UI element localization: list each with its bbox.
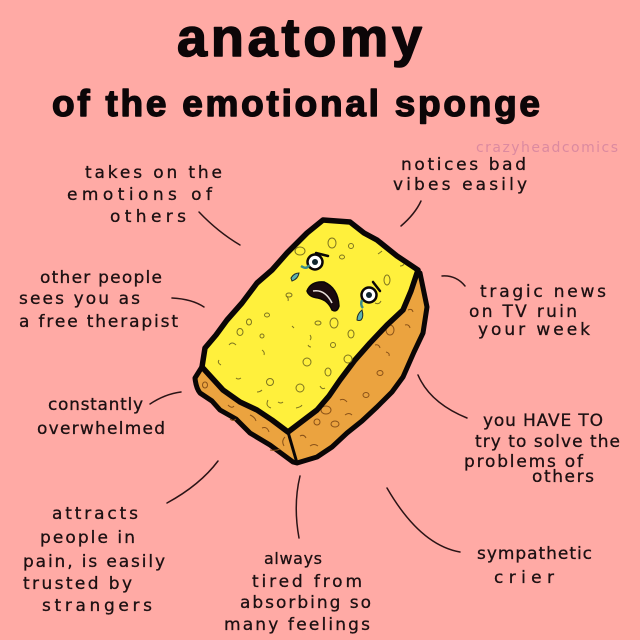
sponge top face <box>202 220 418 432</box>
label: you have to solve problems: you HAVE TO <box>483 411 603 431</box>
icon: left tear <box>291 273 299 281</box>
credit: crazyheadcomics: crazyheadcomics <box>476 140 618 156</box>
label: notices bad vibes <box>393 155 527 195</box>
label: always tired from absorbing: tired from <box>252 572 362 592</box>
label: notices bad vibes: notices bad <box>401 155 526 175</box>
title: anatomy <box>177 8 422 68</box>
icon: crying mouth <box>307 282 339 311</box>
label: attracts people in pain: attracts <box>52 504 138 524</box>
label: attracts people in pain: strangers <box>42 596 152 616</box>
connector: attracts people <box>167 461 218 503</box>
icon: left eye <box>301 253 328 270</box>
label: takes on the emotions of others: takes on the <box>85 163 222 183</box>
label: you have to solve problems: others <box>532 467 594 487</box>
label: notices bad vibes: vibes easily <box>393 175 527 195</box>
label: attracts people in pain <box>23 504 165 616</box>
illustration: sad yellow sponge <box>195 220 427 463</box>
label: takes on the emotions of others <box>67 163 222 227</box>
label: you have to solve problems: problems of <box>464 452 584 472</box>
connector: overwhelmed <box>150 392 181 404</box>
connector: sympathetic crier <box>387 488 460 552</box>
label: always tired from absorbing: absorbing so <box>240 593 371 613</box>
label: always tired from absorbing <box>224 549 371 635</box>
label: tragic news: on TV ruin <box>469 302 577 322</box>
label: tragic news: your week <box>478 320 590 340</box>
label: you have to solve problems: try to solve the <box>475 432 620 452</box>
connector: bad vibes <box>401 201 421 226</box>
label: other people sees you as a free therapist <box>19 268 178 332</box>
label: takes on the emotions of others: others <box>110 207 186 227</box>
label: sympathetic crier: crier <box>494 568 554 588</box>
title <box>52 8 540 124</box>
label: constantly overwhelmed: constantly <box>48 395 143 415</box>
connector: free therapist <box>172 298 204 307</box>
label: other people sees you as a free therapist: a free therapist <box>19 312 178 332</box>
label: other people sees you as a free therapist: sees you as <box>19 289 140 309</box>
icon: right eye <box>361 282 380 308</box>
connector: have to solve <box>418 375 467 418</box>
label: attracts people in pain: trusted by <box>23 574 132 594</box>
connector: takes on the emotions <box>199 212 240 245</box>
sponge side <box>195 273 427 463</box>
sponge top pores <box>218 238 404 408</box>
label: constantly overwhelmed: overwhelmed <box>37 419 165 439</box>
icon: right tear <box>357 310 363 320</box>
label: you have to solve problems <box>464 411 620 487</box>
label: sympathetic crier <box>477 544 592 588</box>
label: takes on the emotions of others: emotions of <box>67 185 213 205</box>
sponge edge divider <box>288 432 297 463</box>
connector: tragic news <box>442 276 465 286</box>
label: tragic news <box>469 282 606 340</box>
label: tragic news: tragic news <box>480 282 606 302</box>
title: of the emotional sponge <box>52 83 540 124</box>
label: sympathetic crier: sympathetic <box>477 544 592 564</box>
label: attracts people in pain: pain, is easily <box>23 552 165 572</box>
label: constantly overwhelmed <box>37 395 165 439</box>
label: attracts people in pain: people in <box>40 528 135 548</box>
label: other people sees you as a free therapist: other people <box>40 268 162 288</box>
connector: always tired <box>296 476 300 538</box>
label: always tired from absorbing: always <box>264 549 322 568</box>
label: always tired from absorbing: many feelings <box>224 615 370 635</box>
sponge side pores <box>202 309 413 450</box>
